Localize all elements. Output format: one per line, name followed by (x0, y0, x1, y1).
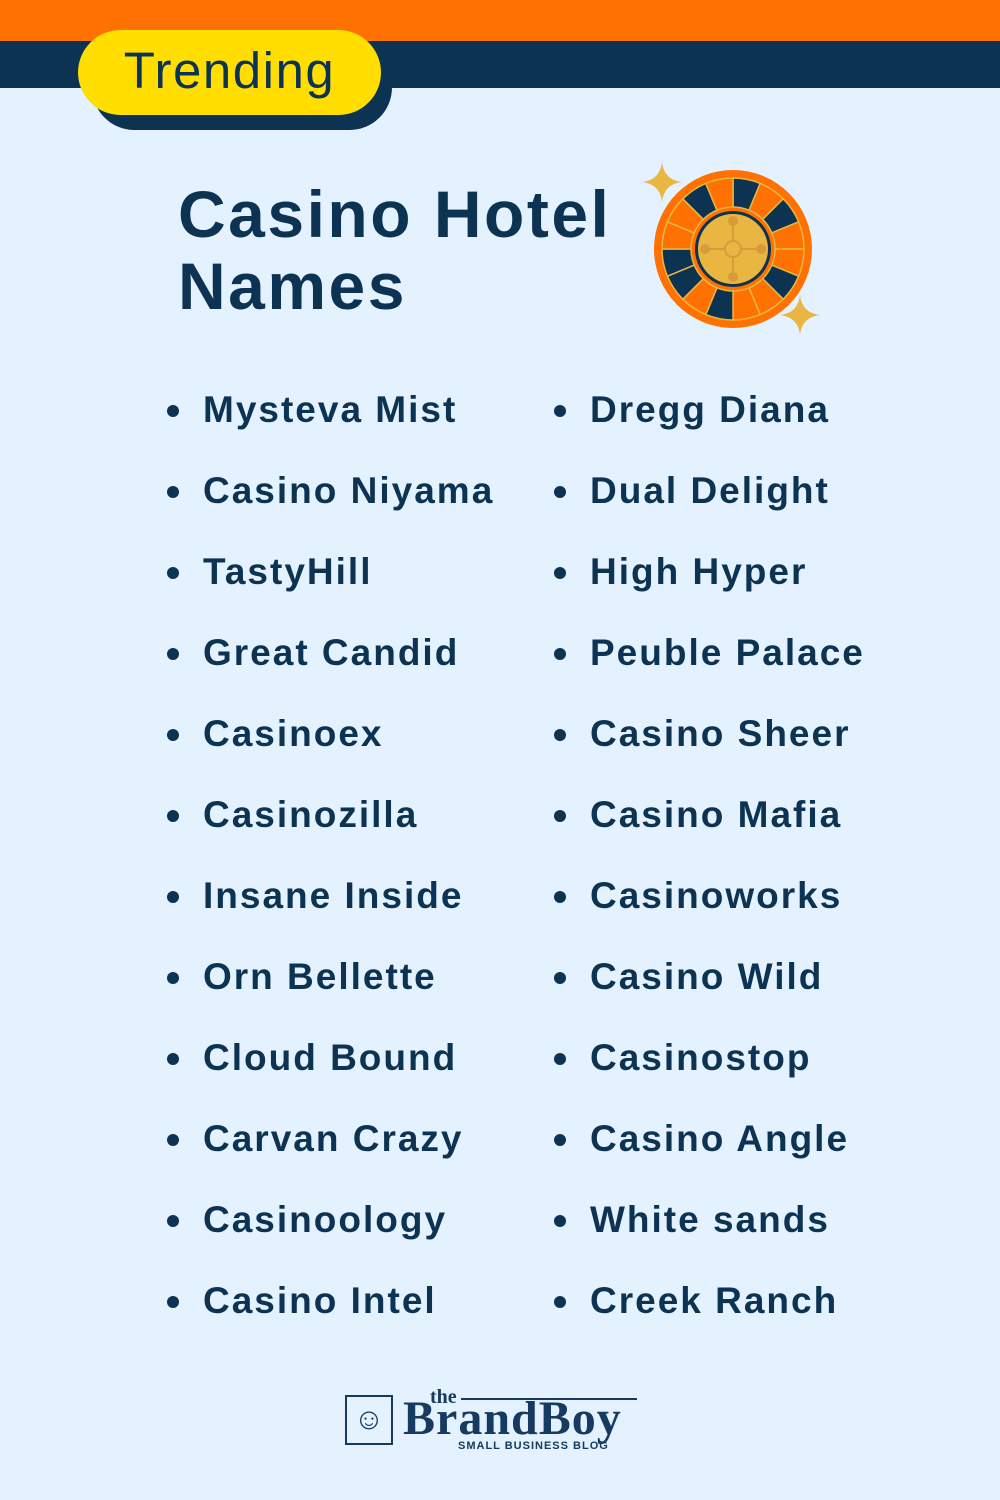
text: Casinostop (590, 1037, 811, 1078)
text: Carvan Crazy (203, 1118, 464, 1159)
logo: the BrandBoy: SMALL BUSINESS BLOG (458, 1440, 609, 1452)
logo: the BrandBoy: the (430, 1386, 457, 1408)
text: White sands (590, 1199, 830, 1240)
text: Casino Angle (590, 1118, 849, 1159)
list: left column (167, 389, 494, 1321)
text: High Hyper (590, 551, 807, 592)
title: Casino Hotel (178, 177, 611, 251)
top orange band (0, 0, 1000, 41)
text: TastyHill (203, 551, 372, 592)
icon: roulette wheel (642, 162, 820, 335)
title: Names (178, 249, 407, 323)
text: Dregg Diana (590, 389, 830, 430)
logo: the BrandBoy (345, 1386, 637, 1452)
text: Casino Mafia (590, 794, 842, 835)
text: Cloud Bound (203, 1037, 457, 1078)
text: Casino Intel (203, 1280, 437, 1321)
text: Peuble Palace (590, 632, 865, 673)
text: Casino Niyama (203, 470, 494, 511)
text: Casinozilla (203, 794, 418, 835)
badge: Trending (78, 30, 392, 130)
text: Insane Inside (203, 875, 463, 916)
text: Casino Wild (590, 956, 823, 997)
text: Dual Delight (590, 470, 830, 511)
text: Casinoworks (590, 875, 842, 916)
title (178, 177, 611, 323)
text: Casinoology (203, 1199, 447, 1240)
navy band (0, 41, 1000, 88)
text: Creek Ranch (590, 1280, 838, 1321)
text: Orn Bellette (203, 956, 437, 997)
logo: the BrandBoy: ☺ (354, 1403, 384, 1436)
text: Casino Sheer (590, 713, 850, 754)
text: Great Candid (203, 632, 459, 673)
badge: Trending: Trending (124, 42, 335, 99)
list: right column (554, 389, 865, 1321)
text: Casinoex (203, 713, 384, 754)
text: Mysteva Mist (203, 389, 457, 430)
logo: the BrandBoy: BrandBoy (403, 1392, 622, 1445)
